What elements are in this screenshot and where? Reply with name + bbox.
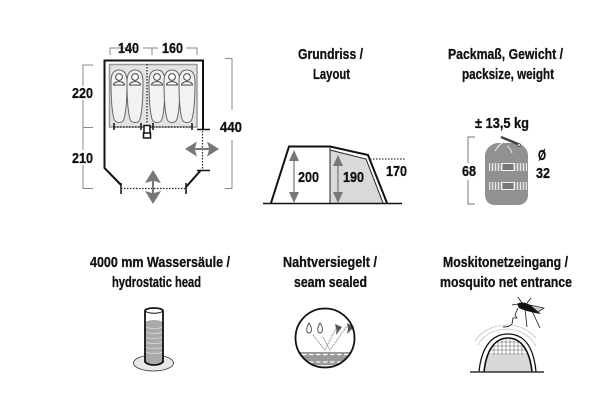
- heading: mosquito net: mosquito net entrance: [440, 274, 572, 291]
- heading: hydrostatic head: 4000 mm Wassersäule /: [90, 254, 231, 271]
- heading: seam sealed: Nahtversiegelt /: [283, 254, 378, 271]
- heading: layout: Grundriss /: [298, 46, 364, 63]
- height arrows: [294, 155, 338, 198]
- heading: pack size: Packmaß, Gewicht /: [448, 46, 564, 63]
- dimensions: 140: [118, 40, 139, 57]
- sleeping bags: [111, 70, 195, 122]
- pack bag: 68: [462, 163, 476, 180]
- heading: hydrostatic head: [90, 254, 231, 291]
- side profile of tent: 170: [386, 163, 407, 180]
- heading: layout: [298, 46, 364, 83]
- side profile of tent: 200: [298, 169, 319, 186]
- side profile of tent: 190: [343, 169, 364, 186]
- heading: seam sealed: [283, 254, 378, 291]
- pack bag: 32: [536, 165, 550, 182]
- heading: mosquito net: [440, 254, 572, 291]
- icon: seam sealed: [295, 308, 355, 369]
- pack bag: Ø: [538, 147, 546, 164]
- dimensions: 220: [72, 85, 93, 102]
- dimensions: 160: [162, 40, 183, 57]
- heading: pack size: [448, 46, 564, 83]
- heading: hydrostatic head: hydrostatic head: [112, 274, 201, 291]
- dimension brackets: [83, 48, 232, 188]
- heading: layout: Layout: [313, 66, 350, 83]
- icon: mosquito net entrance: [470, 297, 544, 372]
- dimensions: [72, 40, 242, 167]
- inner cabin: [110, 64, 197, 127]
- dimensions: 210: [72, 150, 93, 167]
- icon: water column: [134, 308, 174, 371]
- straps: [489, 163, 527, 190]
- mosquito: [503, 297, 544, 328]
- heading: pack size: packsize, weight: [462, 66, 554, 83]
- tent outline: [104, 60, 203, 185]
- floor plan: [72, 40, 242, 204]
- dimensions: 440: [220, 119, 242, 136]
- pack bag: [462, 115, 550, 205]
- zipper icon: [144, 126, 150, 138]
- pack bag: ± 13,5 kg: [475, 115, 529, 132]
- side profile of tent: [263, 146, 407, 204]
- heading: seam sealed: seam sealed: [294, 274, 367, 291]
- heading: mosquito net: Moskitonetzeingang /: [443, 254, 569, 271]
- door arrows: [145, 142, 219, 204]
